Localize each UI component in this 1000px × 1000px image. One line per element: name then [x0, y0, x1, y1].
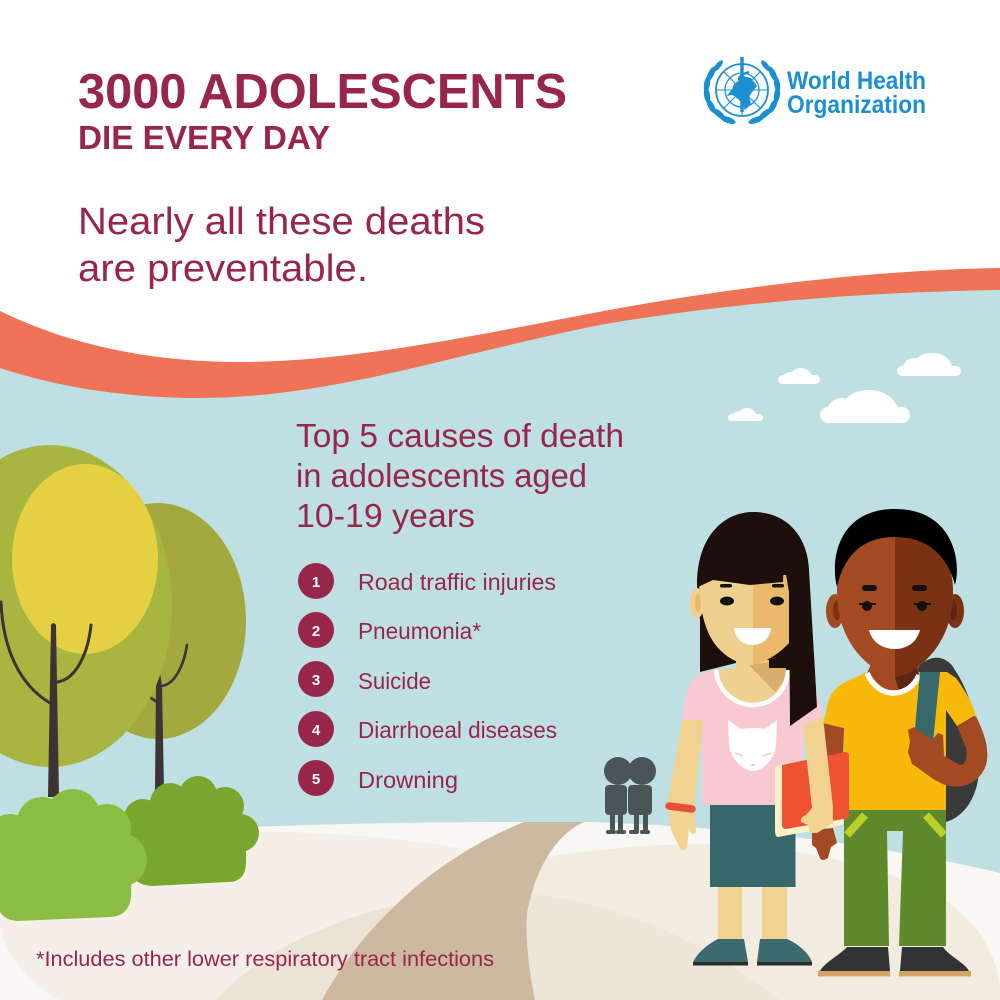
girl character [668, 512, 849, 966]
boy smile [869, 630, 920, 649]
boy t-shirt [823, 672, 976, 810]
boy neck [867, 660, 919, 693]
girl hair curtain [783, 530, 817, 726]
white header background [0, 0, 1000, 362]
distant silhouettes [604, 757, 656, 834]
girl near arm and hand [668, 720, 703, 850]
cause 5: 5 [312, 771, 320, 788]
sky background [0, 260, 1000, 1000]
cause 4 [298, 711, 557, 747]
footnote: *Includes other lower respiratory tract infections [36, 948, 494, 971]
cause 3: 3 [312, 672, 320, 689]
ground hills [0, 822, 1000, 1000]
WHO wordmark: Organization [787, 91, 926, 119]
girl skirt [710, 805, 796, 887]
bag strap [915, 672, 940, 742]
causes list [298, 563, 557, 796]
cause 4: 4 [312, 722, 321, 739]
title [78, 65, 567, 156]
causes heading: 10-19 years [296, 497, 475, 534]
backpack [915, 658, 980, 822]
cloud: small upper [778, 368, 820, 384]
subtitle: are preventable. [78, 248, 368, 290]
cause 4: Diarrhoeal diseases [358, 717, 557, 743]
boy far arm [823, 723, 844, 760]
girl eyes and brows [720, 584, 784, 606]
cause 5: Drowning [358, 767, 458, 793]
causes heading: Top 5 causes of death [296, 417, 624, 454]
WHO logo [703, 57, 926, 126]
title: 3000 ADOLESCENTS [78, 65, 567, 119]
front tree [0, 445, 172, 797]
coral wave band [0, 0, 1000, 398]
boy character [812, 509, 987, 976]
boy hair [835, 509, 957, 587]
path road [322, 822, 584, 1000]
back tree [70, 503, 246, 790]
WHO wordmark [787, 67, 926, 119]
WHO wordmark: World Health [787, 67, 926, 95]
cloud: upper right [897, 353, 961, 376]
book [775, 752, 849, 837]
clouds [728, 353, 961, 423]
girl arm holding book [801, 717, 833, 833]
lower dune left [216, 900, 420, 1000]
lower dune right [520, 893, 780, 1000]
boy hand below book [812, 828, 837, 860]
boy collar [867, 673, 919, 693]
boy arm and hand [908, 716, 987, 787]
cause 2 [298, 612, 481, 648]
girl legs [718, 885, 787, 941]
cause 2: Pneumonia* [358, 618, 481, 644]
cause 1 [298, 563, 556, 599]
boy face [837, 530, 953, 677]
cause 5 [298, 760, 458, 796]
subtitle [78, 201, 485, 290]
girl t-shirt [682, 670, 823, 805]
boy ears [826, 594, 964, 628]
icon: WHO emblem [703, 57, 781, 126]
back bush [124, 776, 259, 886]
light hill [0, 822, 1000, 1000]
cat print [728, 720, 777, 771]
girl smile [734, 628, 771, 645]
cause 1: Road traffic injuries [358, 569, 556, 595]
causes heading: in adolescents aged [296, 457, 587, 494]
boy shoes [818, 947, 971, 976]
boy eyes and brows [859, 585, 931, 611]
cause 2: 2 [312, 623, 320, 640]
front bush [0, 789, 147, 921]
mid hill left [0, 832, 490, 1000]
cloud: large [820, 390, 910, 423]
girl collar [716, 670, 788, 705]
girl bangs [698, 512, 784, 587]
causes heading [296, 417, 624, 534]
silhouette: right child [628, 757, 656, 834]
mid hill right [520, 844, 1000, 1000]
girl shoes [693, 939, 812, 966]
title: DIE EVERY DAY [78, 119, 330, 156]
subtitle: Nearly all these deaths [78, 201, 485, 243]
boy pocket strips [847, 815, 944, 835]
silhouette: left child [604, 757, 632, 834]
cloud: smallest [728, 408, 763, 421]
girl ear [690, 588, 704, 618]
cause 3: Suicide [358, 668, 431, 694]
wristband [669, 806, 692, 809]
cause 3 [298, 661, 431, 697]
girl neck [716, 660, 787, 703]
girl face [699, 575, 789, 665]
boy trousers [844, 810, 946, 946]
cause 1: 1 [312, 574, 320, 591]
girl back hair [697, 512, 817, 726]
